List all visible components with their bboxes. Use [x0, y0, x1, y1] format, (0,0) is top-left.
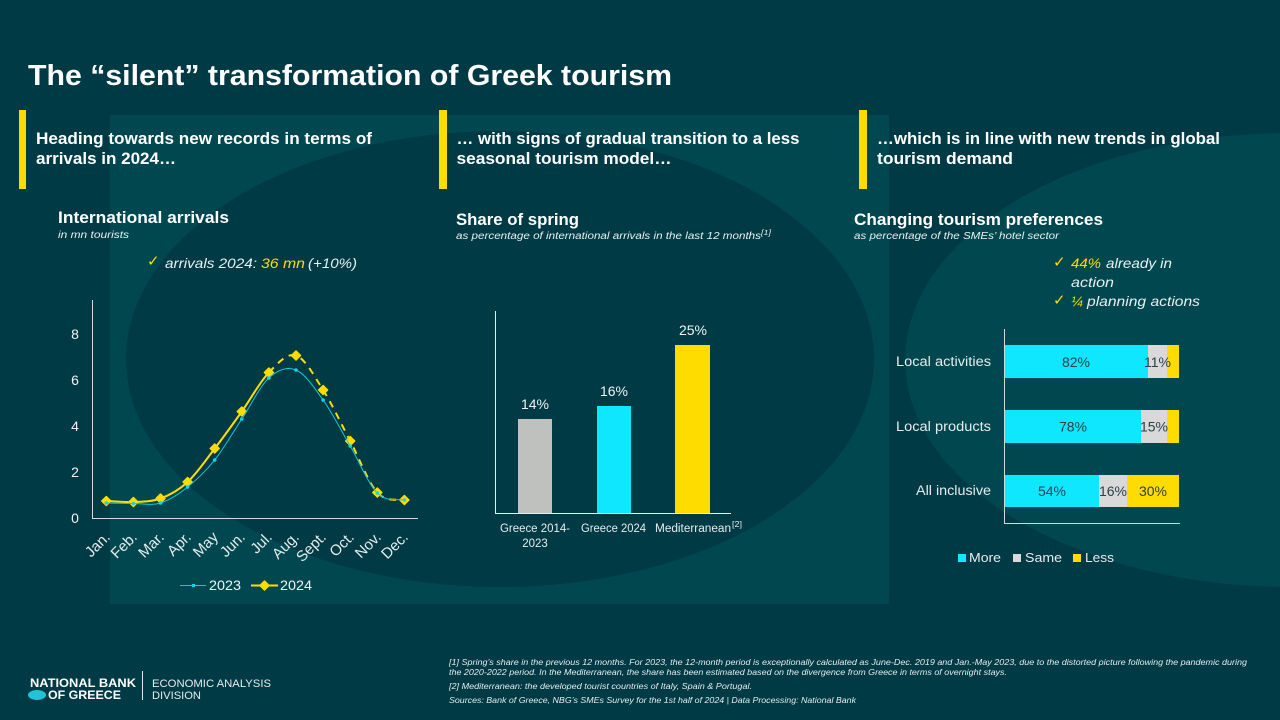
chart heading: share of spring [456, 210, 772, 242]
logo: National Bank of Greece: OF GREECE [48, 688, 121, 702]
panel heading: arrivals [19, 110, 372, 189]
footnotes: the 2020-2022 period. In the Mediterranean, the share has been estimated based on the divergence from Greece in terms of overnight stays. [449, 668, 1007, 677]
bar: Mediterranean [655, 322, 742, 535]
bar: Greece 2014-2023 [500, 396, 570, 550]
panel heading: global trends [859, 110, 1220, 189]
callout: arrivals 2024: (+10%) [308, 255, 357, 271]
row: all inclusive: 54% [1038, 483, 1066, 499]
legend: stacked bars: Less [1085, 550, 1115, 565]
bar: Greece 2014-2023: Greece 2014- [500, 523, 570, 535]
callout: actions: ✓ [1053, 291, 1066, 309]
bar: Mediterranean: 25% [679, 322, 707, 338]
x axis month labels: Aug. [269, 529, 303, 563]
row: all inclusive: 16% [1099, 483, 1127, 499]
row: local products [896, 410, 1179, 443]
logo: National Bank of Greece: ECONOMIC ANALYSIS [152, 678, 271, 690]
bar: Mediterranean: Mediterranean [655, 523, 731, 535]
panel heading: arrivals: arrivals in 2024… [36, 149, 176, 168]
legend: stacked bars [958, 550, 1115, 565]
y axis labels: 4 [71, 418, 79, 434]
series 2023 [104, 368, 406, 505]
callout: actions: action [1071, 274, 1114, 290]
bar: Greece 2024: Greece 2024 [581, 523, 647, 535]
x axis month labels: Oct. [326, 529, 358, 560]
logo: National Bank of Greece: NATIONAL BANK [30, 676, 136, 690]
callout: actions: planning actions [1086, 293, 1200, 309]
legend: stacked bars: Same [1025, 550, 1062, 565]
callout: arrivals 2024 [147, 252, 357, 271]
stacked bar chart: tourism preferences [896, 329, 1180, 524]
panel heading: seasonality: seasonal tourism model… [456, 149, 672, 168]
row: local products: 15% [1140, 418, 1168, 434]
panel heading: seasonality [439, 110, 800, 189]
title: The “silent” transformation of Greek tourism [28, 60, 672, 92]
legend: line chart: 2023 [209, 577, 241, 593]
y axis labels [71, 326, 79, 526]
callout: actions [1053, 253, 1200, 309]
x axis month labels: Feb. [108, 529, 141, 562]
callout: arrivals 2024: arrivals 2024: [165, 255, 257, 271]
y axis labels: 8 [71, 326, 79, 342]
chart heading: changing tourism preferences [854, 210, 1103, 242]
chart heading: changing tourism preferences: Changing tourism preferences [854, 210, 1103, 229]
x axis month labels: Apr. [164, 529, 195, 560]
chart heading: international arrivals: International arrivals [58, 208, 229, 227]
x axis month labels: Sept. [293, 529, 330, 566]
panel heading: global trends: tourism demand [877, 149, 1013, 168]
x axis month labels: Mar. [135, 529, 168, 561]
chart heading: changing tourism preferences: as percentage of the SMEs’ hotel sector [854, 231, 1060, 242]
y axis labels: 6 [71, 372, 79, 388]
footnotes: [1] Spring’s share in the previous 12 months. For 2023, the 12-month period is exceptionally calculated as June-Dec. 2019 and Jan.-May 2023, due to the distorted picture following the pandemic during [448, 658, 1248, 667]
legend: stacked bars: More [969, 550, 1001, 565]
callout: actions: ✓ [1053, 253, 1066, 271]
callout: actions: already in [1106, 255, 1172, 271]
chart heading: international arrivals: in mn tourists [58, 230, 129, 241]
row: all inclusive: 30% [1139, 483, 1167, 499]
legend: line chart: 2024 [280, 577, 312, 593]
chart heading: share of spring: as percentage of international arrivals in the last 12 months [456, 231, 761, 242]
bar: Greece 2024 [581, 383, 647, 535]
x axis month labels: May [190, 528, 222, 561]
row: local activities: 11% [1144, 354, 1171, 370]
bar: Greece 2014-2023: 14% [521, 396, 549, 412]
row: local activities: Local activities [896, 354, 991, 369]
callout: actions: 44% [1071, 255, 1101, 271]
logo: National Bank of Greece: DIVISION [152, 690, 201, 702]
bar chart: share of spring [496, 311, 742, 550]
x axis month labels [82, 528, 412, 566]
panel heading: seasonality: … with signs of gradual transition to a less [456, 129, 800, 148]
panel heading: global trends: …which is in line with new trends in global [877, 129, 1220, 148]
row: local products: 78% [1059, 418, 1087, 434]
legend: line chart [180, 577, 312, 593]
row: local activities [896, 345, 1179, 378]
series 2024 [102, 351, 409, 506]
bar: Mediterranean: [2] [732, 520, 742, 529]
panel heading: arrivals: Heading towards new records in terms of [36, 129, 372, 148]
bar: Greece 2024: 16% [600, 383, 628, 399]
y axis labels: 0 [71, 510, 79, 526]
y axis labels: 2 [71, 464, 79, 480]
x axis month labels: Jan. [82, 529, 114, 561]
footnotes [448, 658, 1248, 705]
row: local products: Local products [896, 419, 991, 434]
chart heading: share of spring: Share of spring [456, 210, 579, 229]
x axis month labels: Jun. [217, 529, 249, 561]
chart heading: share of spring: [1] [760, 230, 772, 237]
row: all inclusive: All inclusive [916, 483, 991, 498]
bar: Greece 2014-2023: 2023 [522, 538, 548, 550]
footnotes: Sources: Bank of Greece, NBG’s SMEs Survey for the 1st half of 2024 | Data Processing: National Bank [449, 696, 857, 705]
row: local activities: 82% [1062, 354, 1090, 370]
callout: arrivals 2024: ✓ [147, 252, 160, 270]
callout: actions: ¼ [1071, 293, 1083, 309]
line chart: international arrivals [71, 300, 418, 593]
callout: arrivals 2024: 36 mn [261, 255, 305, 271]
x axis month labels: Nov. [352, 529, 385, 562]
footnotes: [2] Mediterranean: the developed tourist countries of Italy, Spain & Portugal. [448, 682, 752, 691]
logo: National Bank of Greece [28, 671, 271, 702]
chart heading: international arrivals [58, 208, 229, 241]
x axis month labels: Dec. [378, 529, 412, 563]
row: all inclusive [916, 475, 1179, 507]
x axis month labels: Jul. [247, 529, 276, 557]
